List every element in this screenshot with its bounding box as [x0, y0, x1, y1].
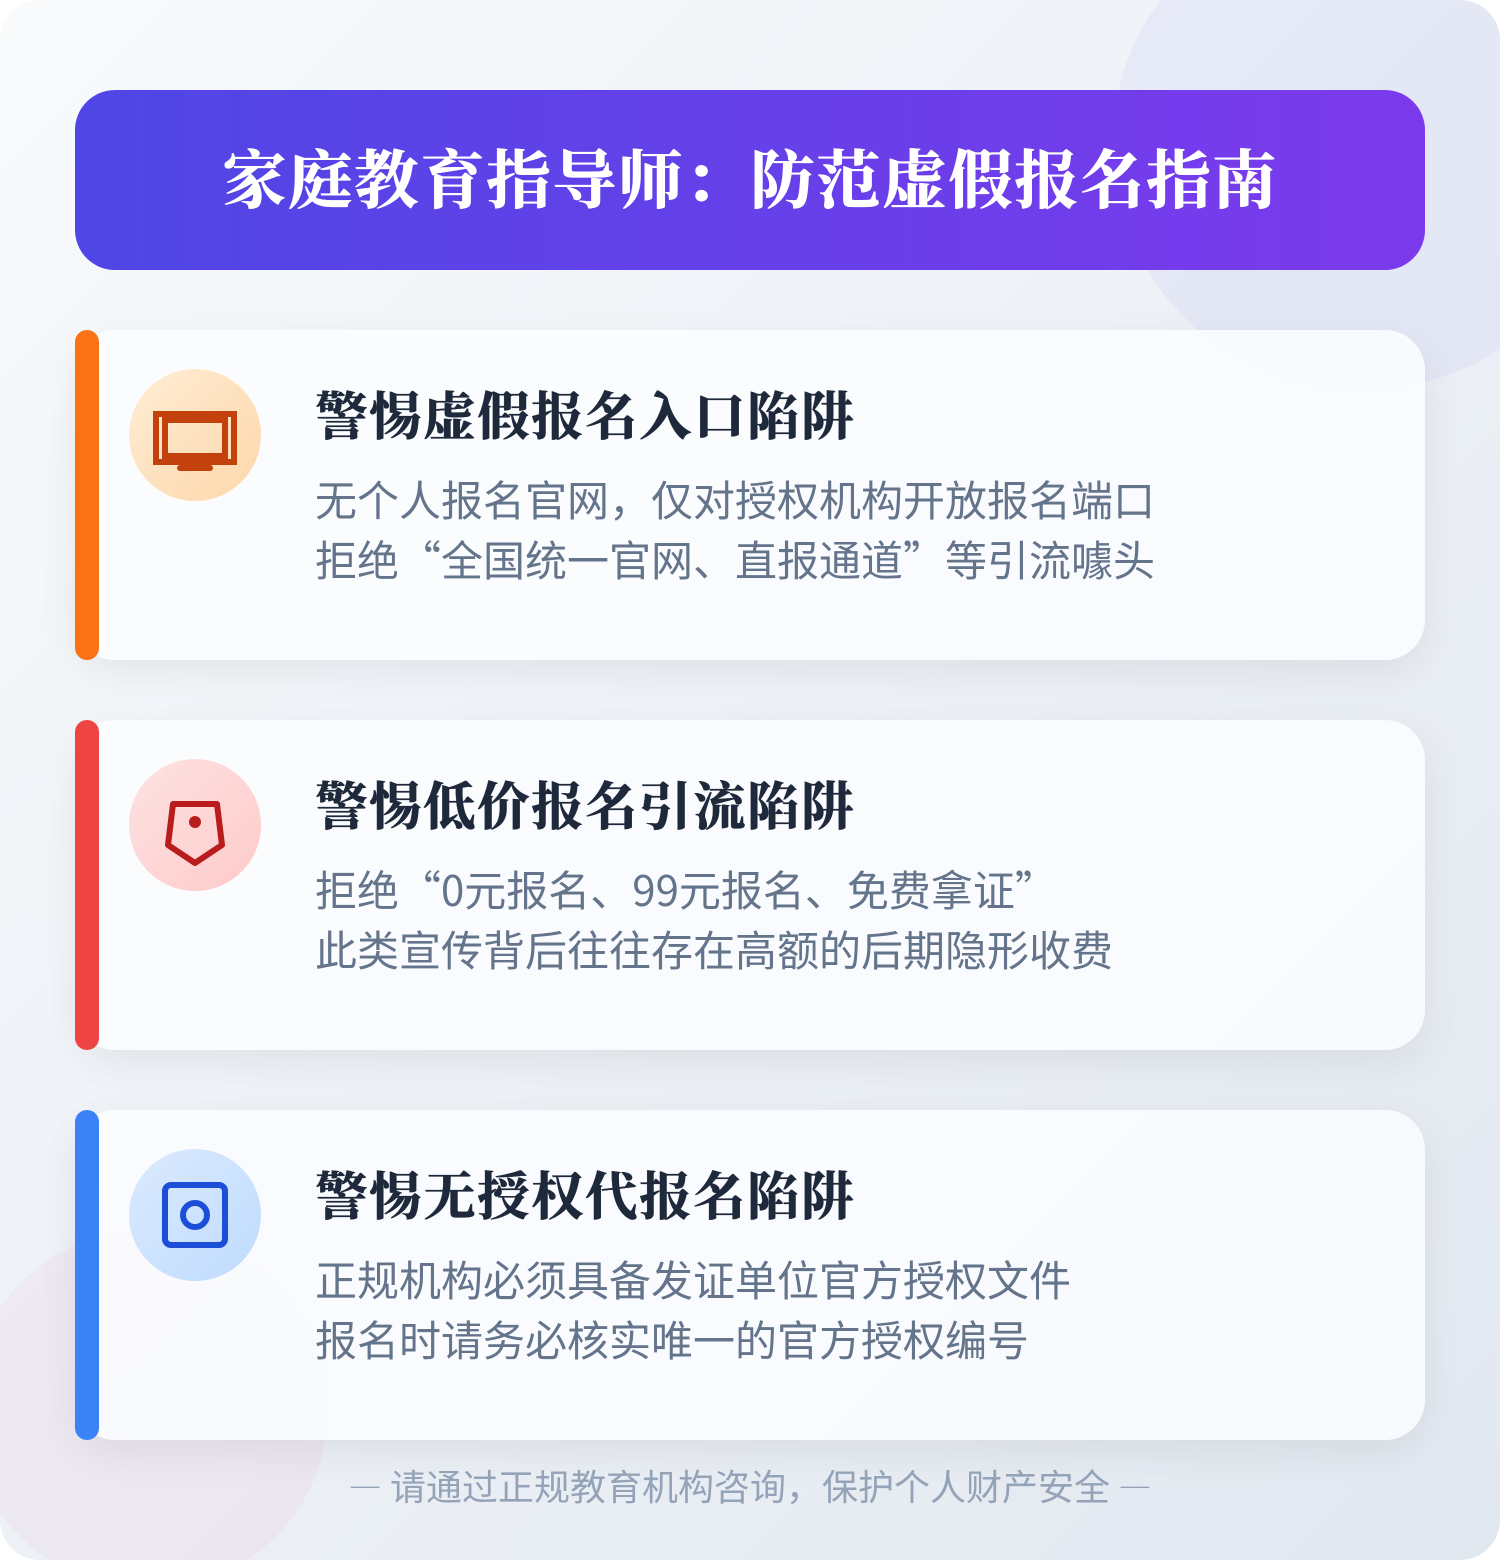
decorative circle: top right	[1112, 0, 1500, 390]
title banner	[75, 90, 1425, 270]
card description: 无个人报名官网，仅对授权机构开放报名端口	[315, 468, 1155, 529]
card description	[315, 468, 1155, 589]
card heading: 警惕低价报名引流陷阱	[315, 765, 855, 840]
card description	[315, 1248, 1071, 1369]
card description: 此类宣传背后往往存在高额的后期隐形收费	[315, 918, 1113, 979]
accent bar: orange	[75, 330, 99, 660]
card description: 拒绝“0元报名、99元报名、免费拿证”	[315, 858, 1057, 919]
card description: 正规机构必须具备发证单位官方授权文件	[315, 1248, 1071, 1309]
card heading: 警惕无授权代报名陷阱	[315, 1155, 855, 1230]
title banner: 家庭教育指导师：防范虚假报名指南	[222, 130, 1278, 222]
card description: 报名时请务必核实唯一的官方授权编号	[315, 1308, 1029, 1369]
icon: monitor	[129, 369, 261, 501]
accent bar: red	[75, 720, 99, 1050]
icon: price tag	[129, 759, 261, 891]
panel: unauthorized agent trap	[75, 1110, 1425, 1440]
panel: low price lure trap	[75, 720, 1425, 1050]
card description: 拒绝“全国统一官网、直报通道”等引流噱头	[315, 528, 1155, 589]
footer note: — 请通过正规教育机构咨询，保护个人财产安全 —	[348, 1459, 1152, 1511]
icon: seal	[129, 1149, 261, 1281]
panel: fake registration portal trap	[75, 330, 1425, 660]
card heading: 警惕虚假报名入口陷阱	[315, 375, 855, 450]
accent bar: blue	[75, 1110, 99, 1440]
decorative circle: bottom left	[0, 1230, 328, 1560]
card description	[315, 858, 1113, 979]
